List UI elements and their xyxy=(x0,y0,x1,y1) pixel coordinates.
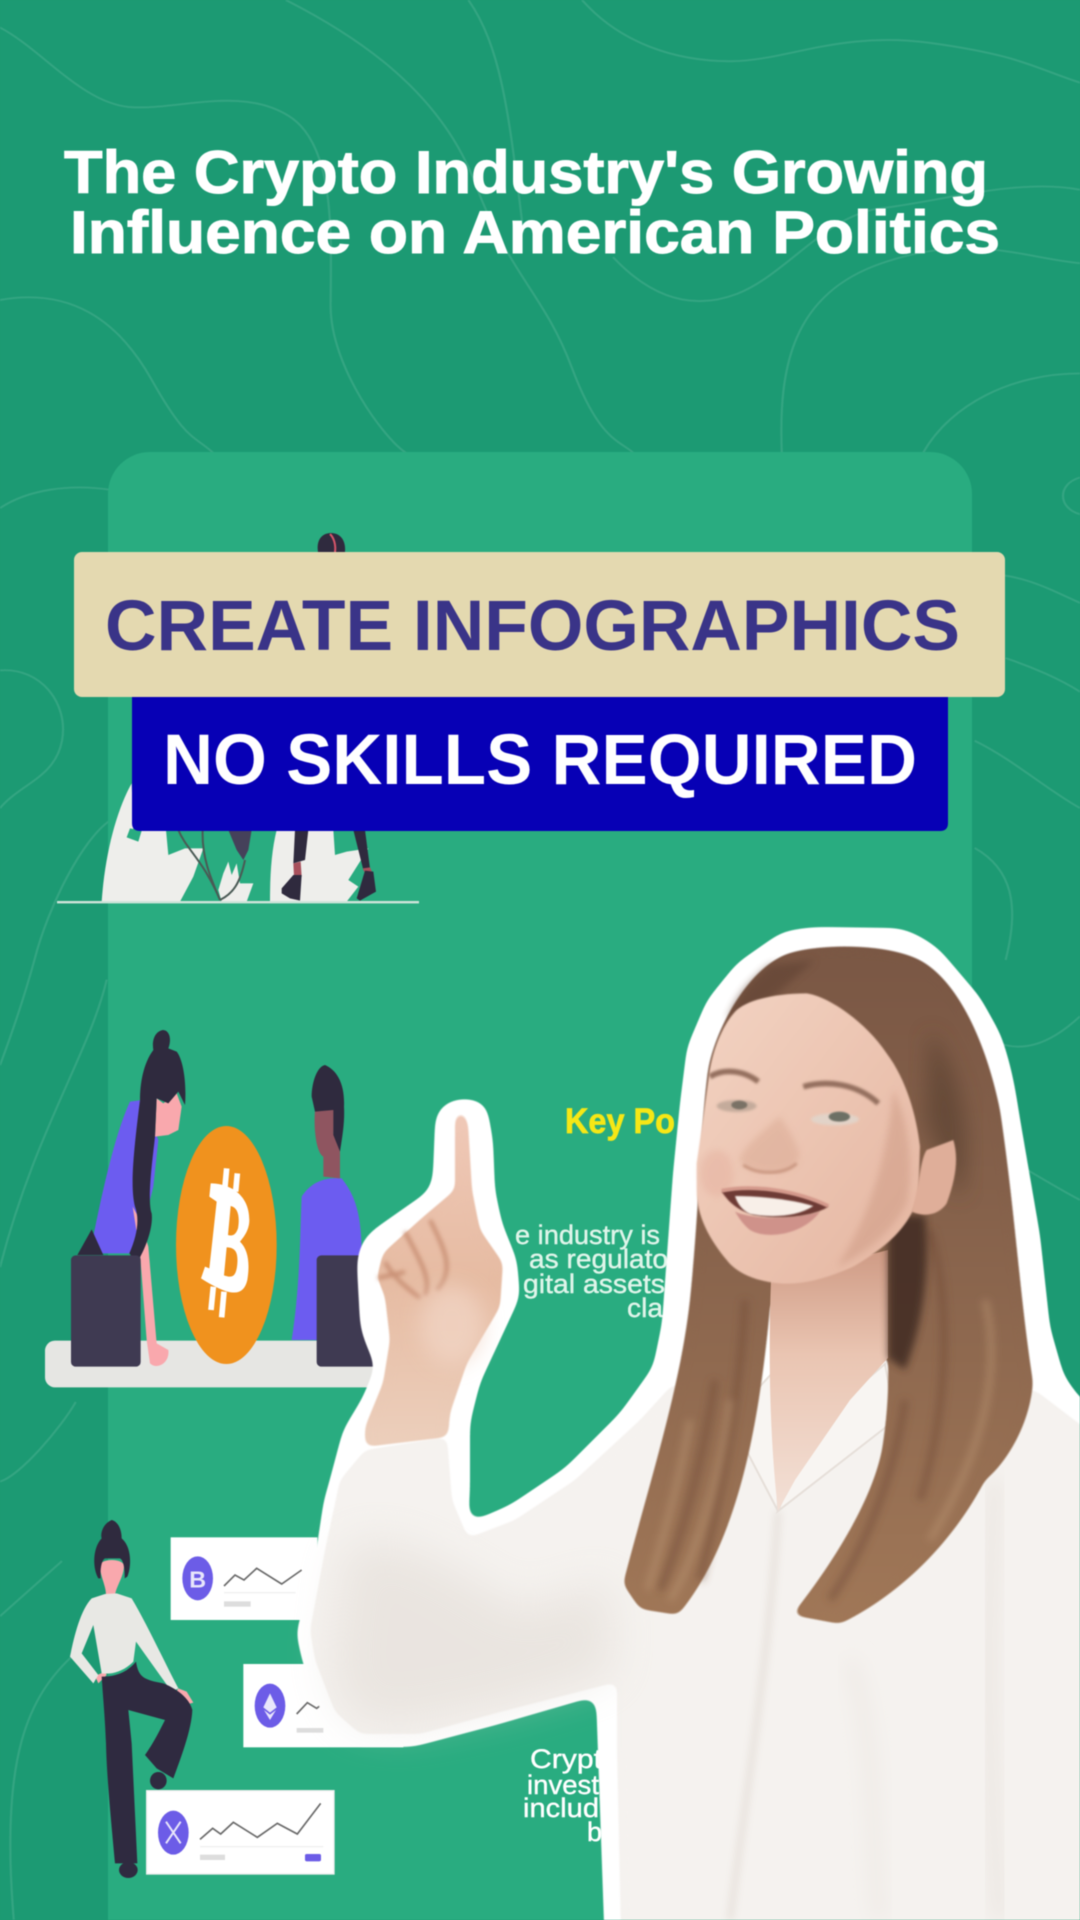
plants and legs xyxy=(102,783,376,902)
card: bitcoin chart xyxy=(171,1537,317,1620)
illustration: woman among plants xyxy=(57,533,419,903)
banner: no skills required xyxy=(132,690,948,831)
neck xyxy=(770,1250,888,1511)
illustration: two people with bitcoin xyxy=(45,1030,382,1387)
banner: create infographics: CREATE INFOGRAPHICS xyxy=(105,587,960,666)
banner: no skills required: NO SKILLS REQUIRED xyxy=(163,721,917,800)
card: bitcoin chart: B xyxy=(189,1566,206,1592)
card: ethereum chart xyxy=(243,1664,403,1747)
face and ear xyxy=(697,993,956,1284)
text block: key point one xyxy=(515,1220,668,1323)
woman at laptop xyxy=(71,1030,185,1367)
text block: key point two: includ xyxy=(523,1793,599,1823)
standing woman xyxy=(70,1520,193,1878)
text block: key point two xyxy=(523,1744,603,1847)
illustration: woman with crypto price cards xyxy=(70,1520,403,1878)
face shading xyxy=(837,1090,910,1267)
nose xyxy=(739,1117,799,1172)
mouth xyxy=(735,1212,820,1235)
text block: key point one: gital assets xyxy=(523,1269,665,1299)
collar xyxy=(730,1364,895,1511)
dark hair under ear xyxy=(888,1215,927,1370)
text block: key point two: invest xyxy=(527,1770,599,1800)
person: smiling woman pointing up xyxy=(296,927,1080,1920)
text block: key point two: b xyxy=(587,1817,602,1847)
title xyxy=(64,139,1000,266)
card: xrp chart xyxy=(147,1791,334,1874)
woman head above banner xyxy=(318,533,345,552)
hair xyxy=(623,946,1033,1624)
ground line xyxy=(57,901,419,903)
eyebrows xyxy=(710,1071,878,1103)
table xyxy=(45,1341,382,1387)
text block: key point one: as regulato xyxy=(529,1244,668,1274)
text block: key point one: cla xyxy=(627,1293,664,1323)
banner: create infographics xyxy=(74,552,1005,697)
title: Influence on American Politics xyxy=(70,199,1000,266)
icon: bitcoin coin xyxy=(176,1126,277,1364)
hand pointing up xyxy=(365,1110,503,1447)
white sticker outline xyxy=(296,927,1080,1920)
man at laptop xyxy=(292,1065,380,1367)
text block: key point one: e industry is xyxy=(515,1220,660,1250)
eyes xyxy=(717,1100,757,1112)
title: The Crypto Industry's Growing xyxy=(64,139,988,206)
panel: main content card xyxy=(108,452,972,1920)
heading: key points: Key Po xyxy=(565,1102,675,1141)
text block: key point two: Crypt xyxy=(530,1744,603,1774)
shirt xyxy=(310,1385,1080,1920)
